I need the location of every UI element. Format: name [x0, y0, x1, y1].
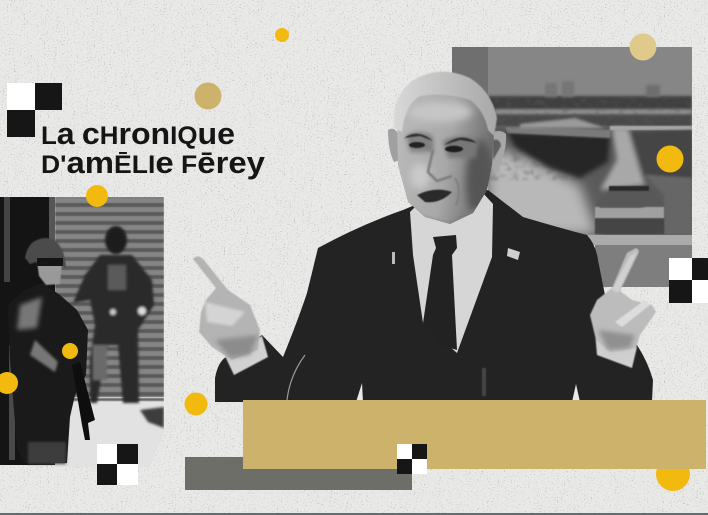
bar: sand title band: [243, 400, 706, 469]
face shading: [404, 100, 492, 224]
bar: grey lower band: [185, 457, 412, 490]
icon: checker top left: [7, 83, 62, 137]
icon: yellow dot on left photo top: [86, 185, 108, 207]
icon: checker right: [669, 258, 708, 303]
icon: yellow dot on right photo: [656, 146, 684, 172]
title: La chronique d'Amélie Férey: La cHronIQue: [41, 116, 235, 151]
icon: checker on band: [397, 444, 427, 474]
background soldier: [73, 226, 154, 403]
icon: pale sand dot on right photo: [630, 34, 656, 60]
icon: yellow dot on soldier: [62, 343, 78, 359]
right hand: [590, 248, 656, 368]
panel: right background photo of tank and city: [452, 47, 692, 287]
title: La chronique d'Amélie Férey: [41, 116, 266, 180]
ears: [388, 129, 400, 162]
panel: left photo of soldiers: [0, 197, 164, 467]
left hand: [193, 256, 268, 375]
icon: yellow dot left edge: [0, 372, 18, 394]
icon: yellow half dot bottom right: [656, 457, 690, 491]
icon: yellow dot lower middle: [184, 392, 208, 416]
suit jacket: [215, 190, 653, 402]
icon: sand dot near title: [194, 82, 222, 110]
icon: tank: [595, 186, 664, 234]
lapel highlights: [287, 248, 580, 402]
head: [388, 72, 506, 235]
shirt: [410, 192, 493, 353]
hair: [394, 72, 497, 136]
icon: checker bottom left: [97, 444, 138, 485]
portrait: speaking man in suit: [193, 72, 656, 402]
icon: small yellow dot top: [275, 28, 289, 42]
title: La chronique d'Amélie Férey: D'amĒLIe Fērey: [41, 145, 266, 180]
foreground soldier: [8, 238, 95, 464]
tie: [423, 235, 457, 350]
brows and eyes: [404, 134, 477, 205]
